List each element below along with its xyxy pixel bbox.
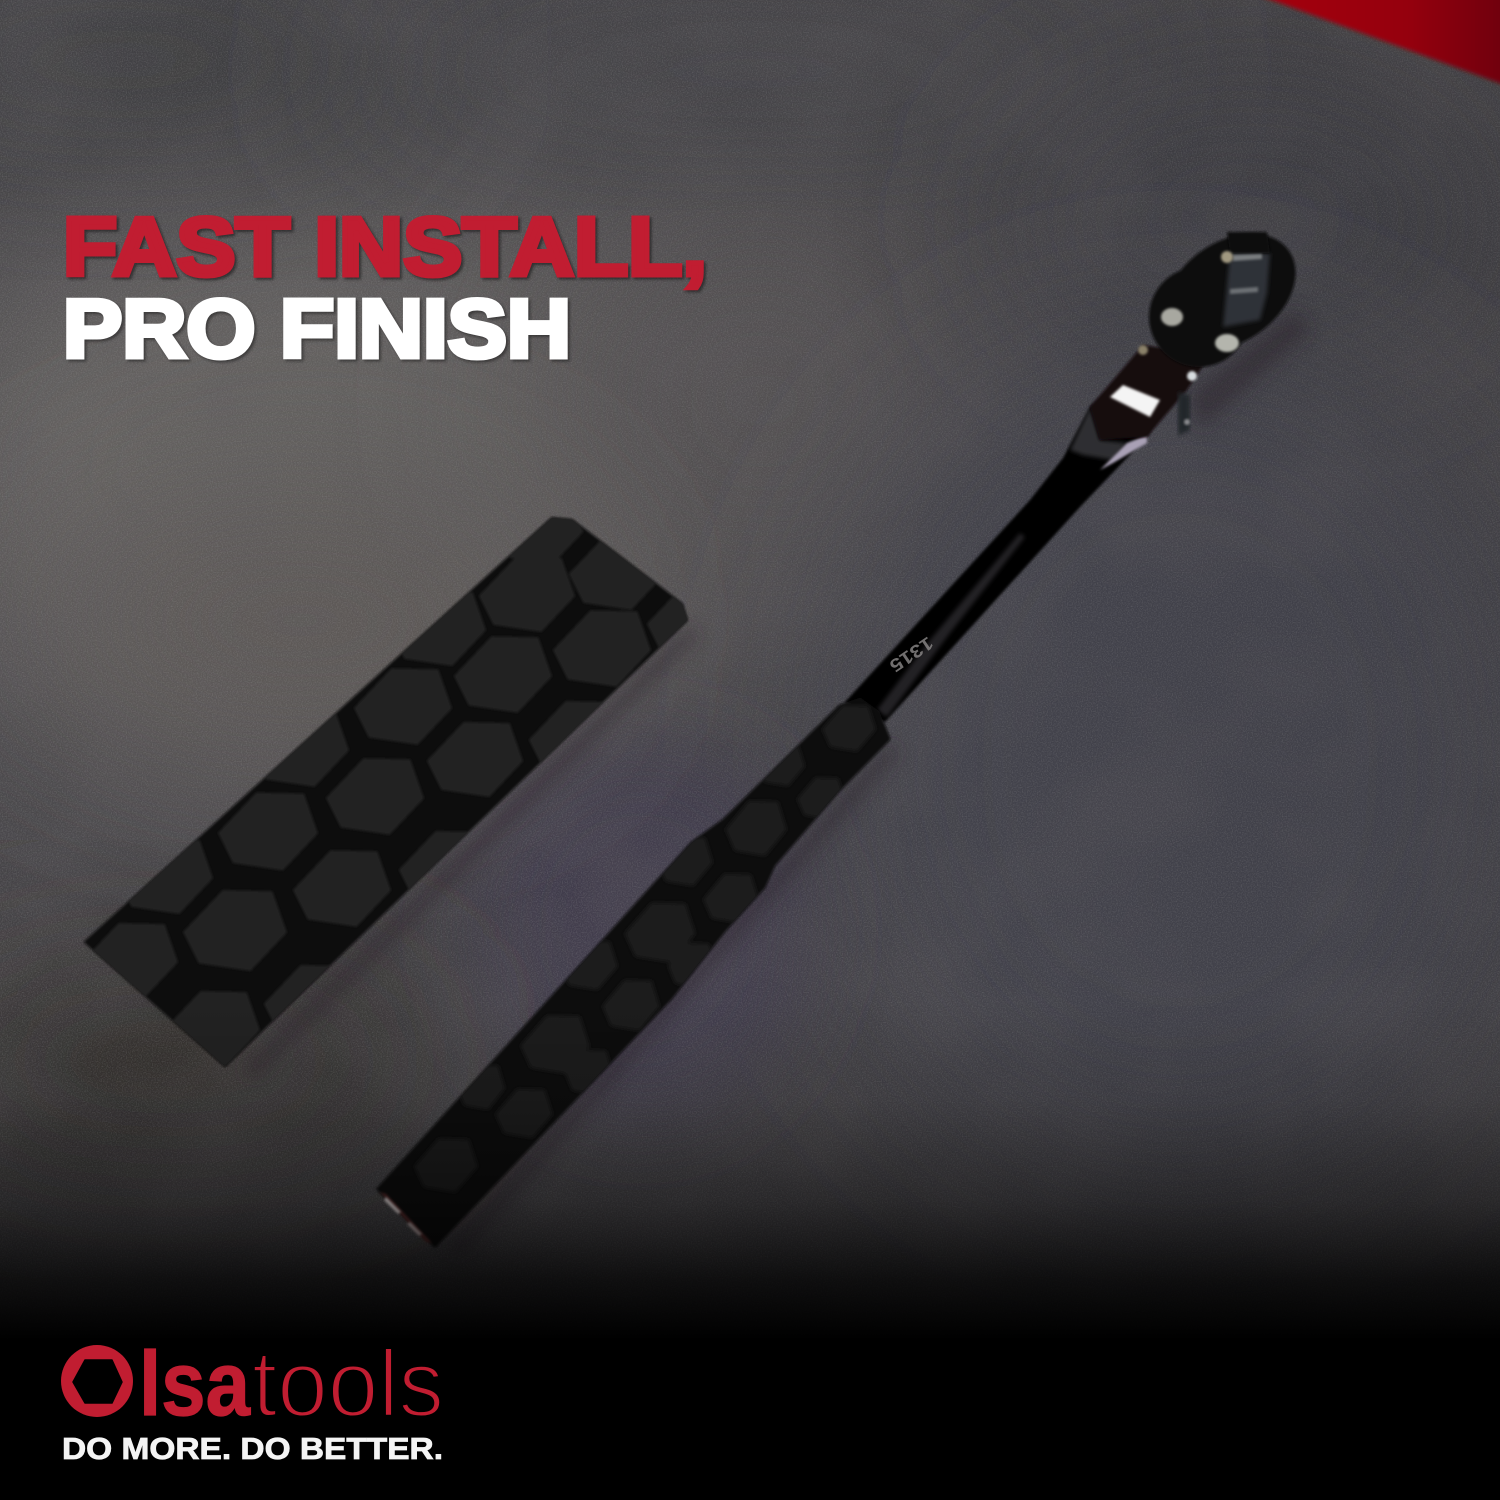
wrench flex joint (1090, 345, 1210, 440)
handle end cap (380, 1192, 432, 1243)
honeycomb grip sleeve, flat (83, 516, 690, 1068)
title line 2: PRO FINISH (63, 282, 571, 375)
title line 1: FAST INSTALL, (63, 200, 707, 293)
shaft engraving: 1315 (886, 633, 937, 676)
logo wordmark: lsa (139, 1334, 251, 1435)
wrench handle with honeycomb grip (378, 699, 889, 1246)
red mat corner (1255, 0, 1500, 87)
grip hexagon pattern (415, 706, 875, 1192)
shadows under tools (240, 310, 1310, 1256)
logo wordmark (139, 1331, 444, 1437)
title line 1: FAST INSTALL, (65, 202, 709, 295)
brand logo (61, 1331, 444, 1437)
bottom dark fade (0, 1000, 1500, 1500)
sleeve hexagon pattern (94, 518, 686, 1065)
logo wordmark: tools (252, 1331, 444, 1437)
title line 2: PRO FINISH (65, 284, 573, 377)
logo icon: hex socket O (61, 1345, 133, 1417)
wrench shaft (845, 372, 1165, 722)
title (63, 200, 709, 377)
wrench head (1142, 210, 1318, 374)
tagline: DO MORE. DO BETTER. (62, 1431, 443, 1466)
ratchet wrench (378, 210, 1318, 1246)
